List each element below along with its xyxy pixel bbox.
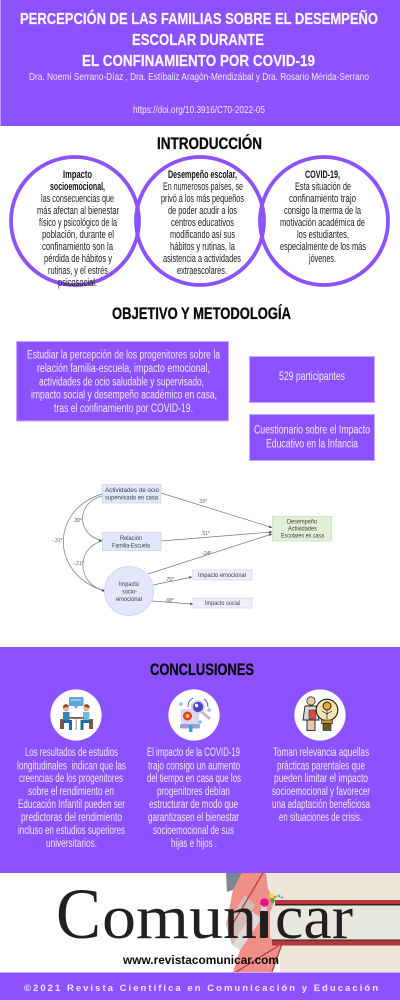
panel: circle impacto socioemocional: socioemocional, <box>50 181 105 193</box>
panel: circle impacto socioemocional: físico y psicológico de la <box>39 217 118 229</box>
text: conclusión 1: sobre el rendimiento en <box>28 786 114 798</box>
panel: circle desempeño escolar <box>136 157 264 285</box>
panel: objetivo <box>16 342 228 421</box>
panel: conclusiones <box>0 647 400 873</box>
text: conclusión 3 <box>272 747 370 824</box>
panel: objetivo: impacto social y desempeño académico en casa, <box>31 390 217 402</box>
website: www.revistacomunicar.com <box>122 953 279 967</box>
panel: circle covid-19: confinamiento trajo <box>289 193 356 205</box>
copyright: ©2021 Revista Científica en Comunicación y Educación <box>24 983 378 994</box>
chart: path diagram: Relación <box>120 536 142 542</box>
panel: circle covid-19: consigo la merma de la <box>284 205 362 217</box>
panel: circle impacto socioemocional: pérdida de hábitos y <box>44 253 112 265</box>
text: conclusión 1: predictoras del rendimiento <box>21 812 122 824</box>
text: conclusión 1: Los resultados de estudios <box>25 747 118 759</box>
chart: path diagram: Impacto <box>119 582 140 588</box>
panel: circle impacto socioemocional <box>11 157 139 289</box>
heading: introducción: INTRODUCCIÓN <box>157 134 262 153</box>
text: conclusión 2: estructurar de modo que <box>149 799 238 811</box>
chart: path diagram: Escolares en casa <box>281 534 325 540</box>
panel: circle desempeño escolar: Desempeño escolar, <box>168 169 237 181</box>
text: conclusión 2: El impacto de la COVID-19 <box>147 747 240 759</box>
heading: conclusiones: CONCLUSIONES <box>150 660 254 679</box>
text: conclusión 2: progenitores debían <box>157 786 230 798</box>
panel: cuestionario: Educativo en la Infancia <box>266 438 358 450</box>
chart: path diagram: supervisado en casa <box>105 496 159 502</box>
doi: https://doi.org/10.3916/C70-2022-05 <box>133 104 265 116</box>
panel: circle impacto socioemocional: confinamiento son la <box>42 241 114 253</box>
panel: objetivo: tras el confinamiento por COVID-19. <box>54 403 193 415</box>
chart: path diagram: Impacto social <box>205 601 240 607</box>
panel: circle desempeño escolar: modificando así sus <box>170 229 235 241</box>
chart: path diagram: socio- <box>122 590 137 596</box>
panel: circle impacto socioemocional: más afectan al bienestar <box>37 205 119 217</box>
chart: path diagram: Impacto emocional <box>198 573 246 579</box>
icon: person and light bulb <box>294 689 346 741</box>
panel: circle covid-19: los estudiantes, <box>297 229 349 241</box>
panel: circle covid-19: jóvenes. <box>308 253 336 265</box>
panel: objetivo: Estudiar la percepción de los progenitores sobre la <box>27 350 220 362</box>
chart: path diagram: Familia-Escuela <box>112 544 151 550</box>
panel: participantes: 529 participantes <box>279 371 345 383</box>
chart: path diagram: .75* <box>165 577 174 583</box>
icon: book and magnifier <box>168 689 220 741</box>
panel: circle desempeño escolar: privó a los más pequeños <box>161 193 244 205</box>
panel: circle covid-19: COVID-19, <box>305 169 340 181</box>
panel: circle impacto socioemocional: rutinas, y el estrés <box>48 265 108 277</box>
logo: Comunicar: car <box>275 884 353 952</box>
panel: circle desempeño escolar: asistencia a actividades <box>163 253 241 265</box>
panel: circle impacto socioemocional: Impacto <box>63 169 92 181</box>
chart: path diagram: -.21* <box>73 561 84 567</box>
text: conclusión 2: socioemocional de sus <box>153 825 234 837</box>
chart: path diagram: Actividades <box>288 526 317 532</box>
text: conclusión 1: creencias de los progenitores <box>19 773 123 785</box>
logo: Comunicar <box>56 874 353 954</box>
icon: people meeting <box>50 689 102 741</box>
text: conclusión 1 <box>17 747 126 850</box>
chart: path diagram: emocional <box>116 597 142 603</box>
chart: path diagram: Actividades de ocio <box>105 488 160 494</box>
panel: circle desempeño escolar: hábitos y rutinas, la <box>170 241 236 253</box>
text: conclusión 2 <box>147 747 241 850</box>
panel: circle desempeño escolar: En numerosos países, se <box>163 181 243 193</box>
panel: circle covid-19: Esta situación de <box>295 181 351 193</box>
text: conclusión 2: del tiempo en casa que los <box>147 773 241 785</box>
text: conclusión 2: trajo consigo un aumento <box>148 760 240 772</box>
chart: path diagram: .30* <box>73 518 82 524</box>
chart: path diagram: -.31* <box>52 538 63 544</box>
panel: objetivo: actividades de ocio saludable y supervisado, <box>39 376 204 388</box>
panel: circle desempeño escolar: de poder acudir a los <box>168 205 237 217</box>
chart: path diagram: .68* <box>165 598 174 604</box>
text: conclusión 1: longitudinales indican que las <box>17 760 126 772</box>
panel: cuestionario <box>250 414 374 460</box>
title <box>20 10 378 70</box>
panel: footer image with books <box>0 873 400 972</box>
panel: circle impacto socioemocional: población, durante el <box>42 229 114 241</box>
chart: path diagram: -.24* <box>201 551 212 557</box>
panel: header <box>0 0 400 126</box>
chart: path diagram: Desempeño <box>287 520 318 526</box>
text: conclusión 3: pueden limitar el impacto <box>274 773 368 785</box>
logo: Comunicar: C <box>56 874 101 954</box>
panel: circle covid-19 <box>260 157 388 285</box>
chart: path diagram: .51* <box>201 531 210 537</box>
photo: books <box>226 873 400 972</box>
chart: path diagram <box>52 484 332 616</box>
text: conclusión 1: incluso en estudios superiores <box>18 825 125 837</box>
text: conclusión 3: en situaciones de crisis. <box>279 812 362 824</box>
text: conclusión 3: prácticas parentales que <box>277 760 365 772</box>
panel: bottom bar <box>0 972 400 1000</box>
text: conclusión 2: garantizasen el bienestar <box>148 812 239 824</box>
panel: circle impacto socioemocional: psicosocial. <box>58 277 97 289</box>
text: conclusión 2: hijas e hijos . <box>171 838 217 850</box>
title: ESCOLAR DURANTE <box>132 32 264 49</box>
heading: objetivo y metodología: OBJETIVO Y METODOLOGÍA <box>112 304 291 323</box>
chart: path diagram: .33* <box>198 499 207 505</box>
panel: participantes <box>250 356 374 402</box>
panel: circle impacto socioemocional: las consecuencias que <box>41 193 114 205</box>
title: EL CONFINAMIENTO POR COVID-19 <box>82 53 315 70</box>
logo: Comunicar: omun <box>102 884 257 952</box>
panel: circle desempeño escolar: centros educativos <box>171 217 234 229</box>
panel: circle desempeño escolar: extraescolares. <box>177 265 227 277</box>
text: conclusión 1: Educación Infantil pueden ser <box>18 799 125 811</box>
panel: objetivo: relación familia-escuela, impacto emocional, <box>37 363 210 375</box>
text: conclusión 1: universitarios. <box>46 838 97 850</box>
